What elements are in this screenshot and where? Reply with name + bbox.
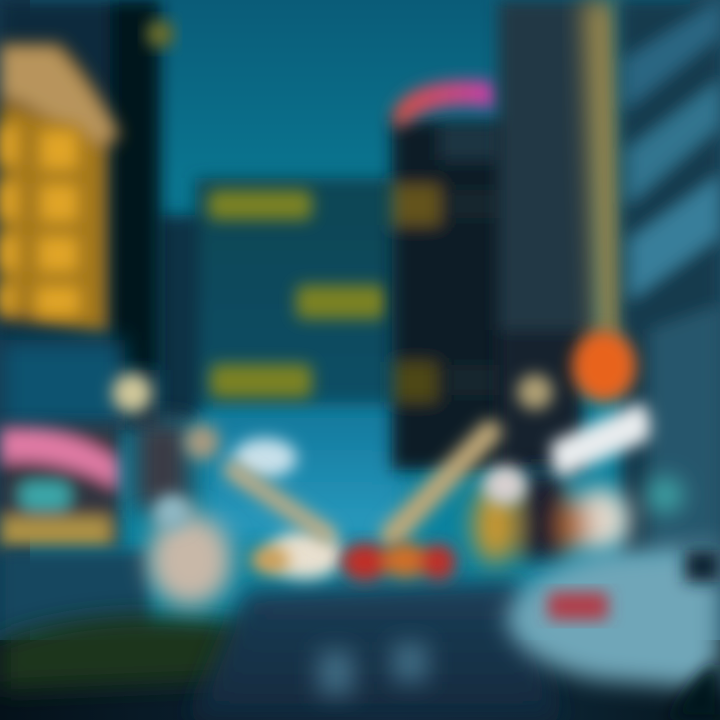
icon: red tail lights (250, 542, 456, 581)
panel: pale blue car (505, 545, 720, 690)
panel: left dark tower (0, 0, 160, 430)
panel: gold pole (582, 0, 632, 340)
panel: central teal building (155, 178, 400, 420)
icon: white sign (551, 402, 650, 478)
panel: road (190, 580, 560, 720)
icon: small yellow light top left (146, 20, 174, 48)
panel: base ground strip (0, 640, 720, 720)
panel: smaller lights (112, 373, 553, 579)
panel: pink storefront (0, 425, 120, 550)
panel: right edge underlay (690, 0, 720, 640)
panel: right striped building (620, 0, 720, 560)
panel: lower-left street (0, 550, 150, 640)
panel: street glow below building (205, 410, 405, 540)
panel: dark tower centre-right (392, 120, 522, 470)
arrow: light beams converging to the street (232, 432, 490, 535)
panel: crowd and street lights (135, 420, 683, 606)
icon: neon rooftop sign (392, 80, 498, 130)
icon: car red plate (548, 592, 608, 620)
panel: left edge underlay (0, 0, 30, 640)
panel: car window and wheel (670, 550, 720, 720)
panel: blue storefront band left (0, 340, 125, 430)
icon: gold hotel windows (0, 125, 80, 316)
icon: orange globe lamp (572, 330, 636, 402)
panel: grey tower right (498, 0, 598, 470)
icon: building signs in yellow (208, 190, 386, 398)
panel: gold hotel facade (0, 42, 122, 335)
icon: road markings (318, 642, 428, 695)
panel: green hedge (0, 615, 266, 690)
